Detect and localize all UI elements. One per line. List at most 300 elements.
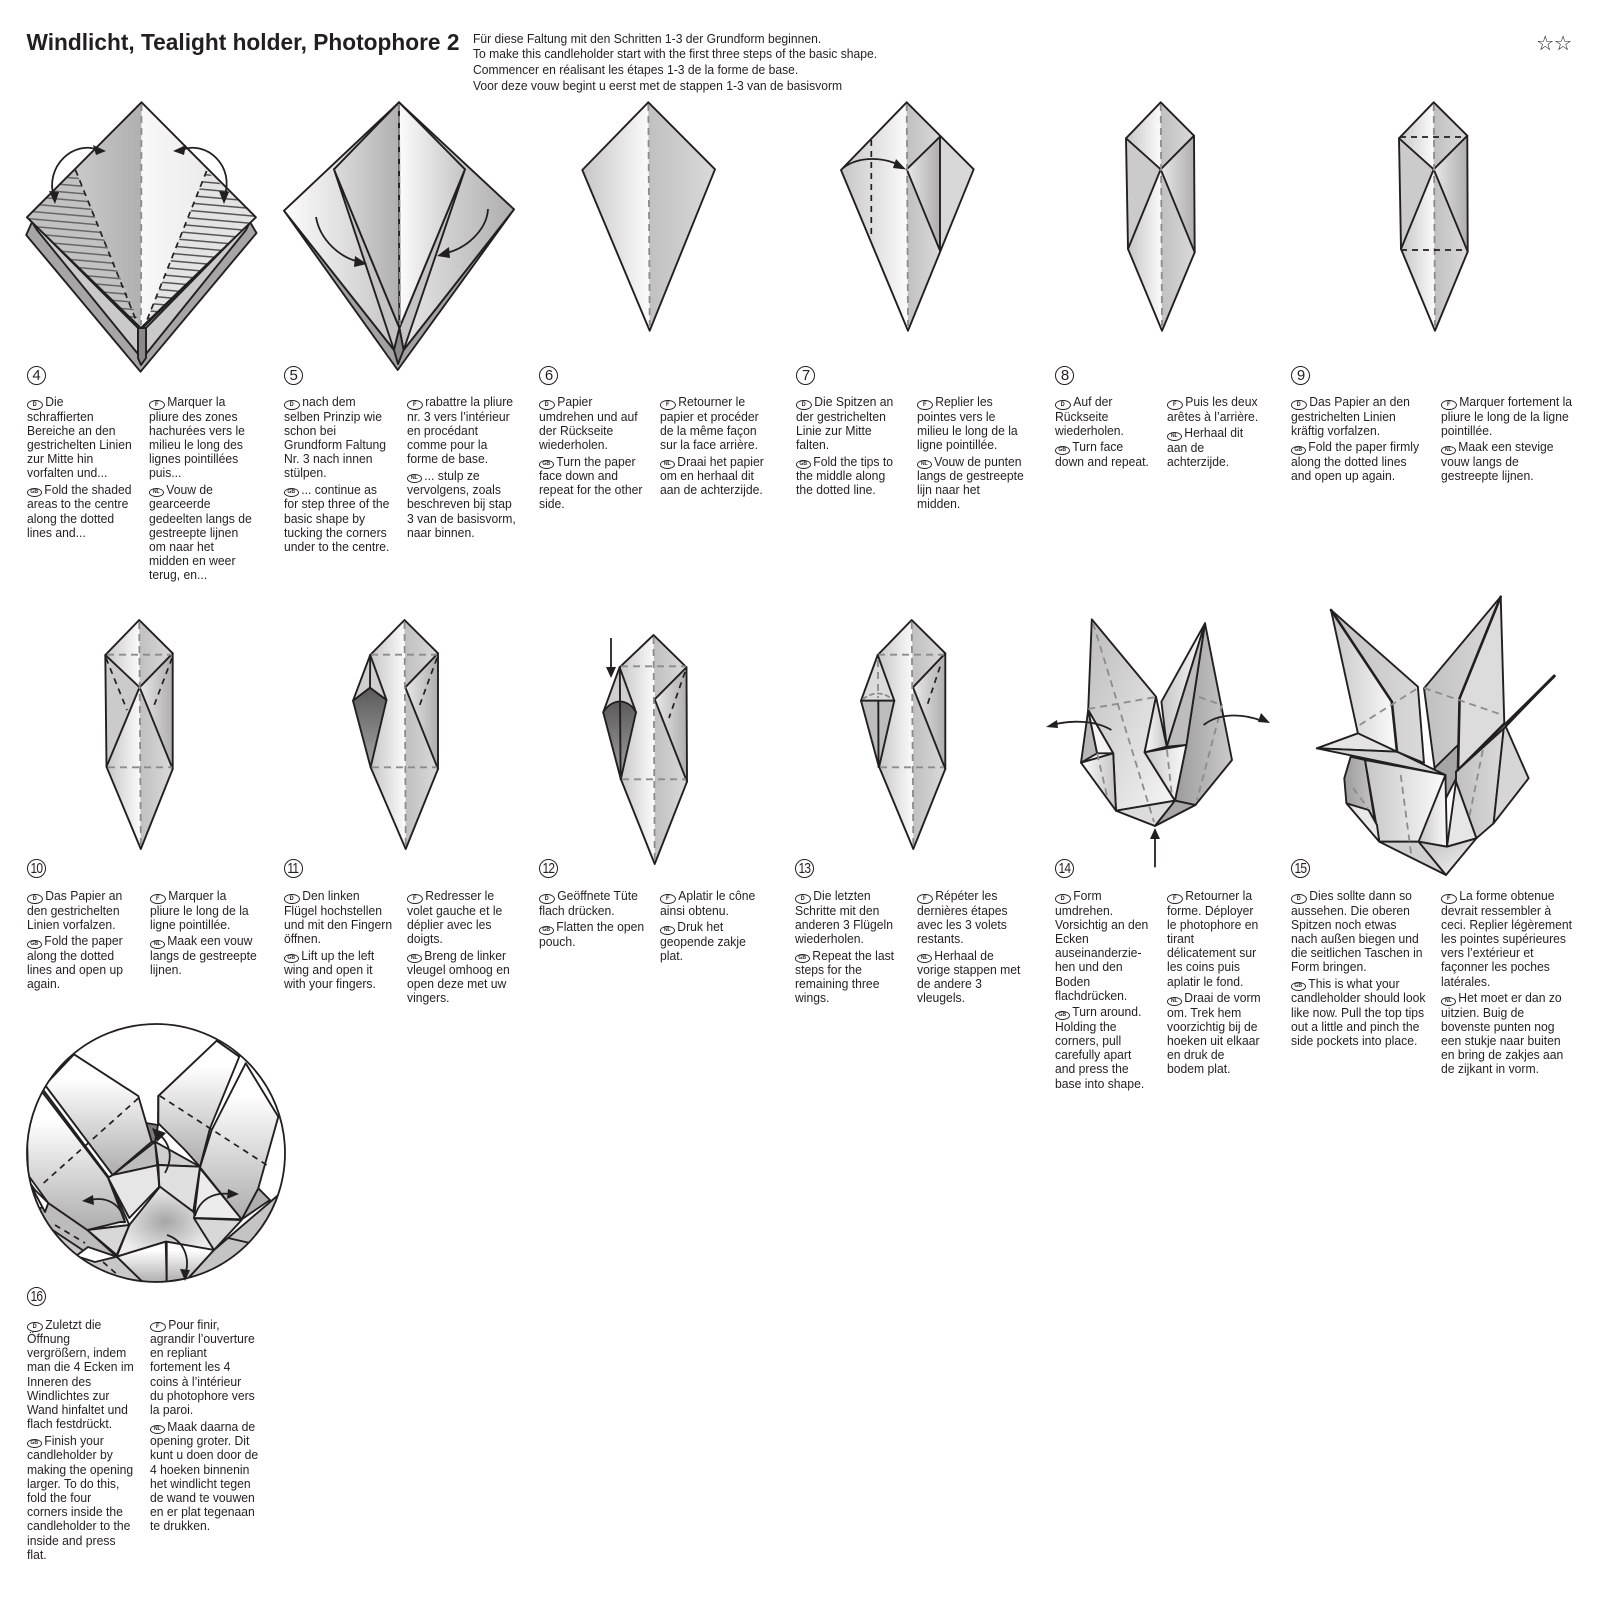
text: F and NL: beschreven bij stap <box>407 496 512 511</box>
text: F and NL: aan de achterzijde. <box>660 482 763 497</box>
text: F and NL: Druk het <box>677 919 723 934</box>
step number: 7 <box>802 367 809 384</box>
text: D and GB: gestrichelten Linien <box>1291 408 1396 424</box>
panel: step 4 <box>25 101 258 582</box>
text: D and GB: zur Mitte hin <box>26 451 93 466</box>
text: F and NL: arêtes à l’arrière. <box>1167 408 1258 424</box>
text: F and NL: F <box>156 896 159 902</box>
text: D and GB: Windlichtes zur <box>26 1388 109 1403</box>
text: F and NL <box>407 394 516 540</box>
text: D and GB: GB <box>287 489 295 495</box>
text: D and GB: Rückseite <box>1055 408 1108 424</box>
text: D and GB: Schritte mit den <box>795 902 879 918</box>
step number <box>26 1287 46 1306</box>
text: D and GB: D <box>1297 896 1301 902</box>
text: F and NL: Herhaal de <box>934 948 994 962</box>
text: F and NL <box>917 889 1020 1008</box>
diagram: step 10 <box>104 619 174 850</box>
step number <box>796 366 815 385</box>
text: F and NL: F <box>155 402 158 408</box>
text: F and NL: een stukje naar buiten <box>1441 1033 1561 1048</box>
text: F and NL: F <box>413 896 416 902</box>
text: F and NL: midden. <box>917 496 960 511</box>
text: F and NL: volet gauche et le <box>407 902 502 918</box>
text: F and NL: Draai het papier <box>677 454 764 468</box>
text: F and NL: nr. 3 vers l’intérieur <box>407 408 510 424</box>
arrow: right corner <box>195 1189 239 1216</box>
intro text: To make this candleholder start with the first three steps of the basic shape. <box>472 46 877 61</box>
text: F and NL: Puis les deux <box>1185 394 1258 409</box>
text: D and GB: öffnen. <box>284 931 321 946</box>
text: F and NL: agrandir l’ouverture <box>150 1331 255 1346</box>
text: D and GB: flachdrücken. <box>1055 988 1127 1003</box>
text: D and GB: lines and... <box>26 525 85 540</box>
panel: step 16 <box>26 1023 286 1562</box>
text: D and GB: Papier <box>557 394 592 409</box>
text: D and GB: pouch. <box>539 934 576 949</box>
text: D and GB: hen und den <box>1055 959 1123 974</box>
text: D and GB: Fold the tips to <box>813 454 893 468</box>
text: D and GB: GB <box>30 489 38 495</box>
step number <box>284 859 303 878</box>
text: D and GB: GB <box>798 955 806 961</box>
step number <box>1055 366 1074 385</box>
text: D and GB: the dotted line. <box>796 482 876 497</box>
text: F and NL: aplatir le fond. <box>1167 974 1243 989</box>
text: D and GB: corners inside the <box>26 1504 122 1519</box>
text: D and GB: man die 4 Ecken im <box>26 1359 133 1374</box>
text: F and NL: comme pour la <box>407 437 487 452</box>
text: D and GB: auseinanderzie- <box>1055 945 1142 960</box>
text: D and GB: making the opening <box>26 1462 133 1477</box>
text: D and GB: carefully apart <box>1055 1047 1131 1062</box>
text: F and NL: dernières étapes <box>917 902 1008 918</box>
text: F and NL: uitzien. Buig de <box>1441 1005 1524 1020</box>
diagram: step 8 <box>1125 101 1196 332</box>
text: F and NL: achterzijde. <box>1167 454 1229 469</box>
text: D and GB: Wand hinfaltet und <box>26 1402 127 1417</box>
text: F and NL: forme. Déployer <box>1167 902 1253 918</box>
text: F and NL: Pour finir, <box>168 1316 220 1332</box>
text: D and GB: Flatten the open <box>556 919 644 934</box>
text: D and GB: GB <box>1294 447 1302 453</box>
diagram: step 6 <box>581 101 716 332</box>
text: D and GB: base into shape. <box>1055 1076 1144 1091</box>
text: D and GB: D <box>32 896 36 902</box>
text: D and GB: stülpen. <box>284 465 326 480</box>
text: F and NL: midden en weer <box>149 553 235 568</box>
text: F and NL: NL <box>153 489 160 495</box>
step number: 15 <box>1295 860 1306 877</box>
text: F and NL: pliure des zones <box>149 408 238 424</box>
text: D and GB: Fold the paper <box>44 933 122 948</box>
text: F and NL: Het moet er dan zo <box>1458 990 1562 1005</box>
text: F and NL: F <box>1173 896 1176 902</box>
text: D and GB: for step three of the <box>284 496 389 511</box>
text: F and NL: om. Trek hem <box>1167 1005 1241 1020</box>
text: F and NL: vleugels. <box>917 990 965 1005</box>
text: D and GB: Bereiche an den <box>26 423 115 438</box>
text: F and NL: gestreepte lijnen <box>149 525 238 540</box>
diagram: step 14 <box>1040 615 1275 873</box>
text: F and NL: Maak daarna de <box>167 1419 255 1434</box>
text: D and GB: Die Spitzen an <box>814 394 893 409</box>
text: D and GB: ... continue as <box>301 482 377 497</box>
step number: 8 <box>1061 367 1068 384</box>
text: F and NL: Répéter les <box>935 888 997 903</box>
panel: step 10 <box>26 619 257 991</box>
text: F and NL: pointes vers le <box>917 408 995 424</box>
text: D and GB: Turn around. <box>1072 1004 1141 1019</box>
text: D and GB: Zuletzt die <box>45 1316 101 1332</box>
text: D and GB: Den linken <box>302 888 359 903</box>
panel: step 7 <box>796 101 1024 511</box>
text: F and NL: Herhaal dit <box>1184 425 1243 440</box>
text: F and NL: F <box>923 896 926 902</box>
text: F and NL: F <box>923 402 926 408</box>
text: D and GB: candleholder should look <box>1291 990 1425 1005</box>
text: F and NL: ... stulp ze <box>424 468 480 483</box>
text: F and NL: F <box>1447 896 1450 902</box>
text: F and NL <box>660 888 755 963</box>
text: F and NL <box>660 394 764 497</box>
text: D and GB: GB <box>287 955 295 961</box>
text: D and GB: Die letzten <box>813 888 871 903</box>
arrow: fold right <box>173 145 229 204</box>
text: D and GB: GB <box>799 461 807 467</box>
text: D and GB: Die <box>45 394 63 409</box>
text: F and NL: pointillée. <box>1441 423 1492 438</box>
text: F and NL: NL <box>1445 447 1452 453</box>
text: D and GB: again. <box>26 976 60 991</box>
step number: 16 <box>30 1288 42 1305</box>
text: F and NL: vers l’extérieur et <box>1441 945 1534 960</box>
text: F and NL: plat. <box>660 948 683 963</box>
text: D and GB <box>26 394 131 540</box>
text: D and GB: along the dotted lines <box>1291 454 1407 469</box>
detail circle outline <box>27 1024 285 1282</box>
text: D and GB: under to the centre. <box>284 539 389 554</box>
text: F and NL: papier et procéder <box>660 408 759 424</box>
text: F and NL: Marquer la <box>167 394 225 409</box>
text: F and NL: ligne pointillée. <box>150 917 230 932</box>
text: D and GB: Nr. 3 nach innen <box>284 451 372 466</box>
text: F and NL: coins à l’intérieur <box>150 1374 241 1389</box>
text: F and NL: forme de base. <box>407 451 488 466</box>
text: F and NL: de zijkant in vorm. <box>1441 1061 1539 1076</box>
arrow: press down <box>606 638 616 678</box>
text: D and GB: umdrehen. <box>1055 902 1113 918</box>
text: F and NL <box>149 394 252 582</box>
text: F and NL: NL <box>664 461 671 467</box>
panel: step 15 <box>1291 590 1581 1080</box>
text: D and GB: like now. Pull the top tips <box>1291 1005 1424 1020</box>
text: D and GB: D <box>289 896 293 902</box>
step number: 10 <box>30 860 42 877</box>
panel: step 11 <box>284 619 510 1005</box>
diagram: step 16 detail circle <box>26 1023 286 1283</box>
text: D and GB: D <box>1061 896 1065 902</box>
panel: step 5 <box>283 101 516 554</box>
text: F and NL <box>917 394 1024 511</box>
arrow: back corner <box>152 1128 170 1173</box>
text: F and NL: en bring de zakjes aan <box>1441 1047 1563 1062</box>
step number <box>1055 859 1074 878</box>
text: F and NL <box>407 888 510 1005</box>
text: F and NL: Marquer fortement la <box>1459 394 1572 409</box>
arrow: fold left corner in <box>316 217 367 267</box>
text: D and GB: der gestrichelten <box>796 408 886 424</box>
text: F and NL: hachurées vers le <box>149 423 245 438</box>
text: F and NL: façonner les poches <box>1441 959 1550 974</box>
intro text: Voor deze vouw begint u eerst met de stappen 1-3 van de basisvorm <box>472 78 842 93</box>
text: F and NL: F <box>156 1324 159 1330</box>
text: D and GB: D <box>545 896 549 902</box>
text: F and NL: tirant <box>1167 931 1194 946</box>
text: D and GB: D <box>1297 402 1301 408</box>
text: D and GB: larger. To do this, <box>26 1476 119 1491</box>
text: F and NL: fortement les 4 <box>150 1359 230 1374</box>
text: D and GB: Geöffnete Tüte <box>557 888 638 903</box>
text: D and GB: candleholder to the <box>26 1518 130 1533</box>
text: F and NL: om en herhaal dit <box>660 468 754 483</box>
text: D and GB: Das Papier an den <box>1309 394 1410 409</box>
step number <box>26 859 46 878</box>
text: F and NL: naar binnen. <box>407 525 475 540</box>
text: F and NL: NL <box>411 955 418 961</box>
text: D and GB: kräftig vorfalzen. <box>1291 423 1380 438</box>
text: D and GB: fold the four <box>26 1490 91 1505</box>
text: F and NL: avec les 3 volets <box>917 917 1007 932</box>
diagram: step 11 <box>352 619 439 850</box>
text: F and NL <box>1167 889 1261 1079</box>
text: F and NL: en er plat tegenaan <box>150 1504 255 1519</box>
diagram: step 9 <box>1398 101 1469 332</box>
text: D and GB: flat. <box>26 1547 46 1562</box>
diagram: step 13 <box>860 619 946 850</box>
text: D and GB: Boden <box>1055 974 1090 989</box>
text: D and GB: Fold the paper firmly <box>1308 439 1419 454</box>
text: D and GB: wiederholen. <box>1055 423 1124 438</box>
text: F and NL: rabattre la pliure <box>425 394 513 409</box>
text: F and NL: 4 hoeken binnenin <box>150 1462 249 1477</box>
text: D and GB: face down and <box>539 468 618 483</box>
text: F and NL: latérales. <box>1441 974 1490 989</box>
text: F and NL: NL <box>1445 998 1452 1004</box>
text: F and NL: lijnen. <box>150 962 182 977</box>
text: D and GB: along the dotted <box>26 511 114 526</box>
text: F and NL: devrait ressembler à <box>1441 902 1551 918</box>
text: F and NL: pliure le long de la ligne <box>1441 408 1569 424</box>
text: F and NL: les coins puis <box>1167 959 1240 974</box>
text: D and GB: D <box>32 1324 36 1330</box>
text: F and NL: NL <box>154 1426 161 1432</box>
text: D and GB: GB <box>1058 447 1066 453</box>
text: D and GB: side pockets into place. <box>1291 1033 1417 1048</box>
text: F and NL: terug, en... <box>149 567 207 582</box>
text: F and NL: la paroi. <box>150 1402 193 1417</box>
text: D and GB <box>1291 889 1425 1051</box>
text: F and NL: les pointes supérieures <box>1441 931 1566 946</box>
arrow: left corner <box>82 1195 125 1223</box>
arrow: pull right <box>1204 713 1270 725</box>
arrow: fold right corner in <box>437 209 488 258</box>
text: D and GB: wing and open it <box>284 962 372 977</box>
text: F and NL: te drukken. <box>150 1518 210 1533</box>
diagram: step 4 <box>25 101 258 373</box>
text: F and NL: ligne pointillée. <box>917 437 997 452</box>
text: F and NL: en procédant <box>407 423 478 438</box>
text: D and GB: schon bei <box>284 423 336 438</box>
text: D and GB: vorfalten und... <box>26 465 107 480</box>
text: F and NL: Aplatir le cône <box>678 888 755 903</box>
text: F and NL: F <box>1173 402 1176 408</box>
panel: step 13 <box>795 619 1020 1005</box>
text: D and GB: Turn face <box>1072 439 1123 454</box>
text: D and GB: Linien vorfalzen. <box>26 917 115 932</box>
step number: 11 <box>288 860 299 877</box>
step number: 6 <box>545 367 552 384</box>
text: F and NL: bovenste punten nog <box>1441 1019 1555 1034</box>
panel: step 14 <box>1055 590 1280 1095</box>
text: F and NL: kunt u doen door de <box>150 1447 258 1462</box>
text: D and GB: Linie zur Mitte <box>796 423 872 438</box>
text: F and NL <box>150 888 257 977</box>
text: D and GB: die seitlichen Taschen in <box>1291 945 1423 960</box>
text: F and NL: NL <box>921 461 928 467</box>
text: F and NL: Retourner la <box>1185 888 1252 903</box>
text: F and NL: lignes pointillées <box>149 451 238 466</box>
text: F and NL: NL <box>154 941 161 947</box>
text: F and NL: NL <box>921 955 928 961</box>
text: F and NL: le photophore en <box>1167 917 1258 932</box>
text: F and NL: langs de gestreepte <box>917 468 1024 483</box>
text: D and GB: GB <box>1294 983 1302 989</box>
text: D and GB <box>795 888 894 1005</box>
text: F and NL: ceci. Replier légèrement <box>1441 917 1572 932</box>
text: D and GB: Grundform Faltung <box>284 437 386 452</box>
text: F and NL <box>1441 889 1572 1079</box>
text: D and GB: side. <box>539 496 565 511</box>
text: F and NL: Vouw de punten <box>934 454 1021 468</box>
text: D and GB: and press the <box>1055 1061 1129 1076</box>
step number <box>795 859 814 878</box>
text: D and GB: along the dotted <box>26 948 114 963</box>
text: D and GB: flach drücken. <box>539 902 615 918</box>
text: D and GB: wings. <box>795 990 829 1005</box>
text: D and GB: out a little and pinch the <box>1291 1019 1419 1034</box>
step number: 12 <box>543 860 554 877</box>
text: F and NL: en druk de <box>1167 1047 1224 1062</box>
text: F and NL: F <box>413 402 416 408</box>
step number <box>539 366 558 385</box>
text: F and NL: doigts. <box>407 931 443 946</box>
text: F and NL: bodem plat. <box>1167 1061 1231 1076</box>
title: Windlicht, Tealight holder, Photophore 2 <box>26 29 459 55</box>
step number: 13 <box>799 860 810 877</box>
text: D and GB: Öffnung <box>26 1331 70 1346</box>
text: D and GB: den gestrichelten <box>26 902 119 918</box>
text: F and NL: de wand te vouwen <box>150 1490 255 1505</box>
text: D and GB: Holding the <box>1055 1019 1117 1034</box>
step number <box>1291 859 1310 878</box>
text: D and GB: Vorsichtig an den <box>1055 917 1148 932</box>
text: D and GB: Fold the shaded <box>44 482 131 497</box>
diagram: step 15 <box>1310 592 1560 880</box>
text: F and NL <box>150 1318 258 1536</box>
text: F and NL: milieu le long des <box>149 437 243 452</box>
intro text: Für diese Faltung mit den Schritten 1-3 der Grundform beginnen. <box>472 30 821 46</box>
step number <box>26 366 46 385</box>
text: D and GB: with your fingers. <box>284 976 376 991</box>
text: D and GB: GB <box>30 941 38 947</box>
text: F and NL: vingers. <box>407 990 450 1005</box>
text: F and NL: 3 van de basisvorm, <box>407 511 516 526</box>
text: D and GB: GB <box>30 1440 38 1446</box>
text: D and GB: steps for the <box>795 962 862 977</box>
text: F and NL: du photophore vers <box>150 1388 255 1403</box>
text: F and NL: gestreepte lijnen. <box>1441 468 1534 483</box>
text: F and NL: Redresser le <box>425 888 494 903</box>
text: D and GB: D <box>801 896 805 902</box>
text: D and GB <box>539 394 642 511</box>
text: D and GB: D <box>289 402 293 408</box>
diagram: step 5 <box>283 101 515 371</box>
step number <box>1291 366 1310 385</box>
intro text <box>472 30 877 93</box>
text: D and GB: lines and open up <box>26 962 122 977</box>
text: D and GB: umdrehen und auf <box>539 408 638 424</box>
text: F and NL: Retourner le <box>678 394 745 409</box>
text: D and GB <box>539 888 644 949</box>
text: D and GB: tucking the corners <box>284 525 386 540</box>
text: F and NL: déplier avec les <box>407 917 491 932</box>
text: D and GB: anderen 3 Flügeln <box>795 917 893 932</box>
text: D and GB: und mit den Fingern <box>284 917 392 932</box>
text: F and NL: NL <box>411 475 418 481</box>
text: F and NL <box>1167 394 1258 469</box>
text: D and GB: schraffierten <box>26 408 93 424</box>
panel: step 6 <box>539 101 764 511</box>
text: D and GB: der Rückseite <box>539 423 613 438</box>
text: F and NL: opening groter. Dit <box>150 1433 249 1448</box>
text: D and GB: nach außen biegen und <box>1291 931 1419 946</box>
step number <box>539 859 558 878</box>
text: F and NL: hoeken uit elkaar <box>1167 1033 1260 1048</box>
text: D and GB: GB <box>542 927 550 933</box>
text: D and GB: Form <box>1073 888 1102 903</box>
text: D and GB: Das Papier an <box>45 888 122 903</box>
text: F and NL: het windlicht tegen <box>150 1476 251 1491</box>
text: F and NL: de andere 3 <box>917 976 982 991</box>
difficulty stars: ☆☆ <box>1536 31 1572 55</box>
text: F and NL: Vouw de <box>166 482 213 497</box>
text: D and GB: Finish your <box>44 1433 103 1448</box>
text: D and GB: D <box>545 402 549 408</box>
text: F and NL: open deze met uw <box>407 976 506 991</box>
diagram: step 7 <box>840 101 975 332</box>
text: D and GB <box>1291 394 1419 483</box>
panel: step 12 <box>539 634 755 963</box>
text: D and GB: selben Prinzip wie <box>284 408 382 424</box>
step number: 9 <box>1297 367 1304 384</box>
text: D and GB <box>26 1318 133 1564</box>
text: F and NL: milieu le long de la <box>917 423 1018 438</box>
text: D and GB: D <box>802 402 806 408</box>
text: D and GB: Turn the paper <box>556 454 636 468</box>
text: F and NL: Replier les <box>935 394 993 409</box>
text: F and NL: Maak een stevige <box>1458 439 1554 454</box>
